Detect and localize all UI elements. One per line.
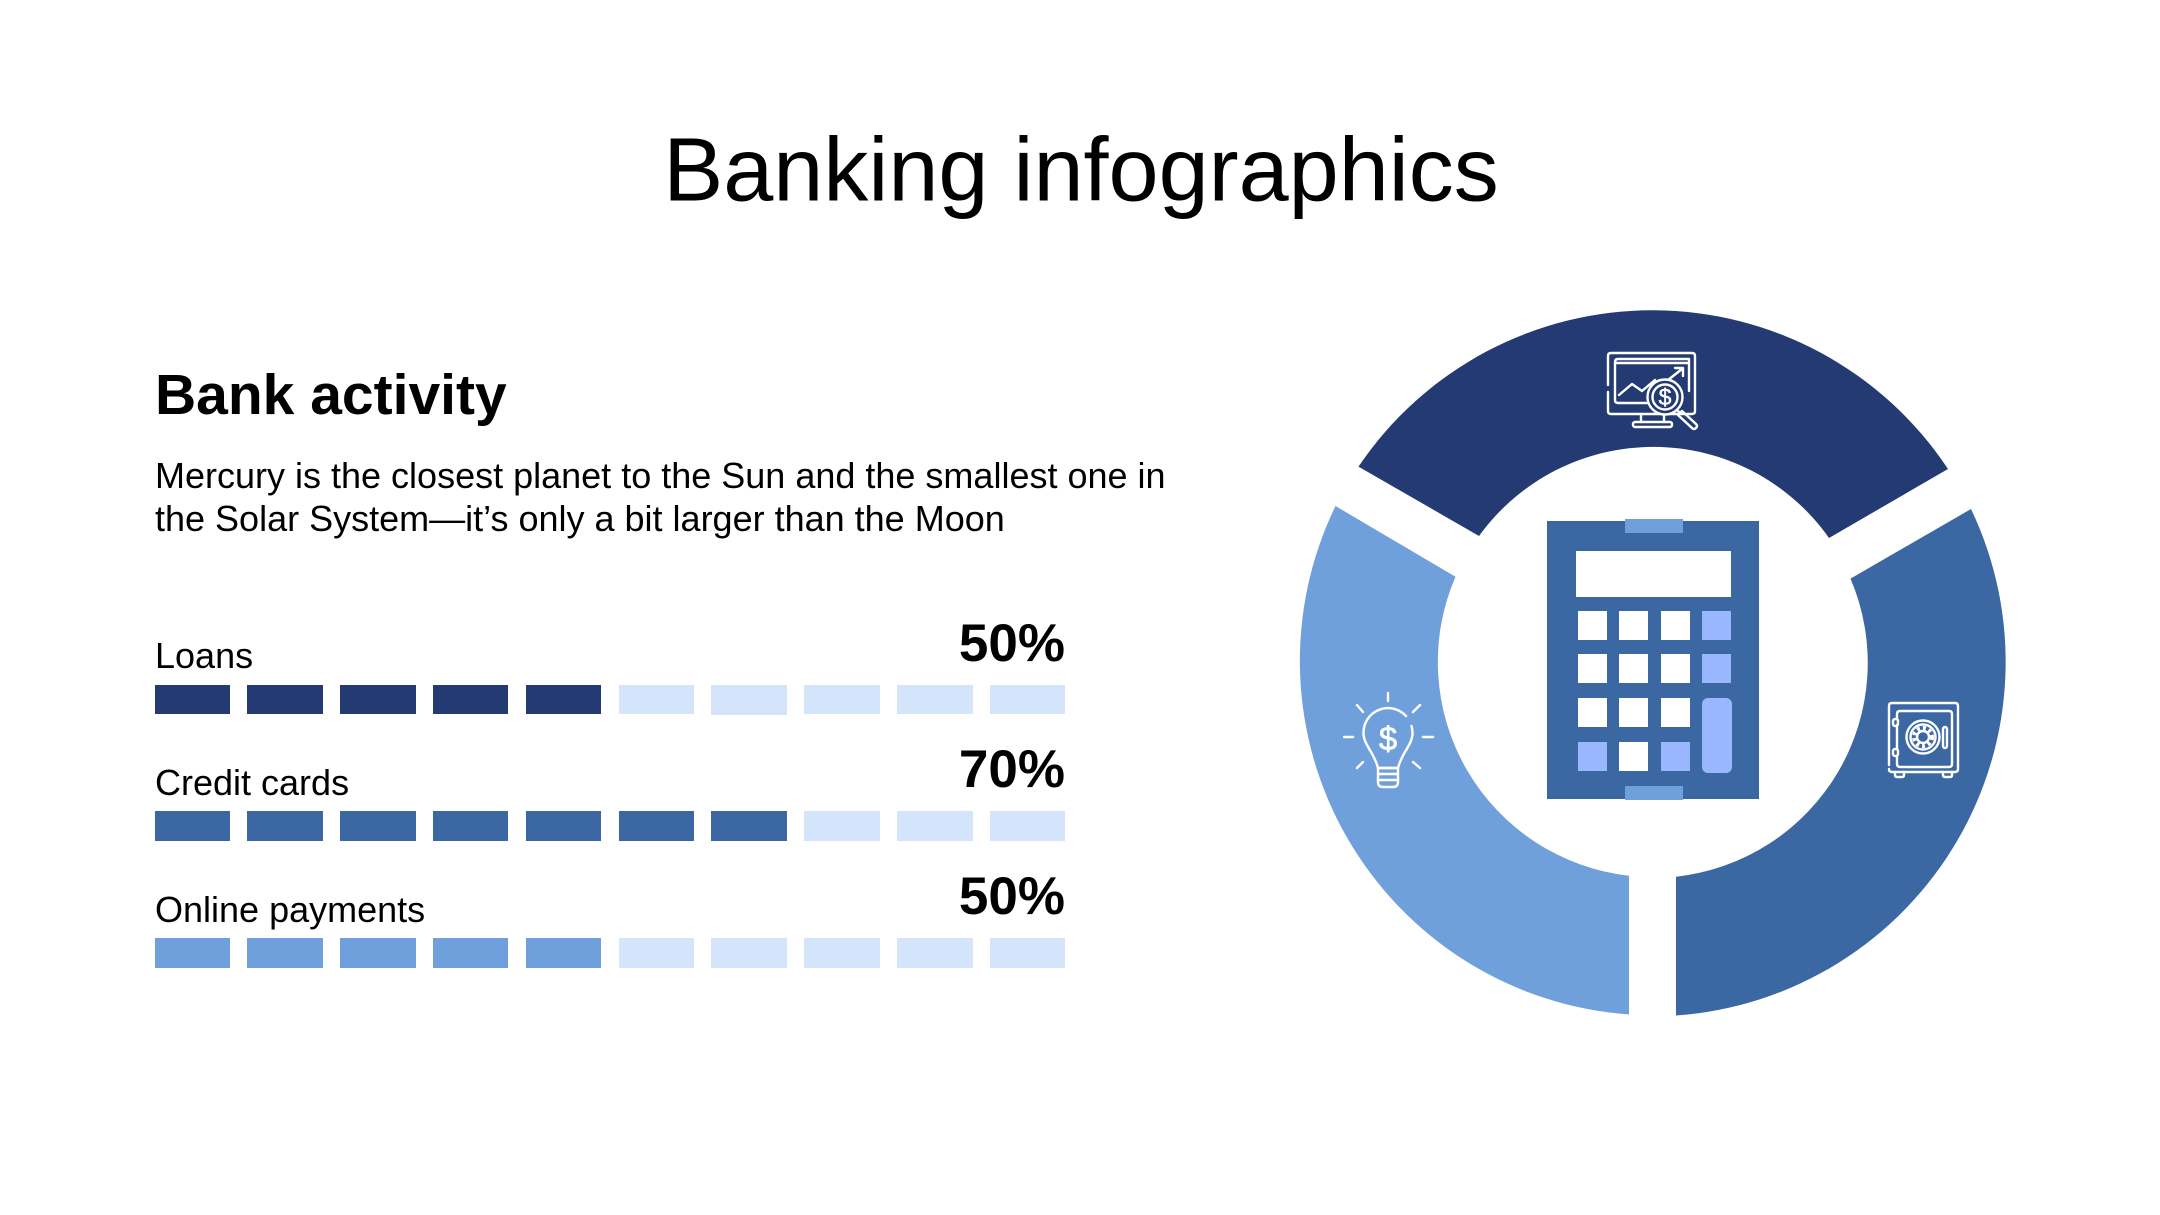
progress bar: online payments: [155, 938, 1065, 968]
progress bar: credit cards: [155, 811, 1065, 841]
progress row: online payments: [155, 867, 1065, 968]
calculator keys: [1578, 611, 1732, 773]
value: loans 50%: 50%: [959, 614, 1065, 673]
progress row: credit cards: [155, 740, 1065, 841]
ring segment: left: [1300, 506, 1629, 1014]
ring diagram: [1300, 310, 2006, 1016]
value: credit cards 70%: 70%: [959, 740, 1065, 799]
calculator body: [1547, 521, 1759, 799]
icon: light bulb: [1344, 693, 1433, 787]
progress bar: loans: [155, 685, 1065, 715]
icon: light bulb dollar sign: $: [1379, 720, 1397, 757]
label: credit cards: Credit cards: [155, 762, 349, 803]
body text: Mercury is the closest planet to the Sun and the smallest one in: [155, 455, 1166, 496]
icon: monitor with magnifier: [1608, 353, 1697, 429]
progress row: loans: [155, 614, 1065, 715]
title: Banking infographics: [663, 120, 1499, 220]
label: online payments: Online payments: [155, 889, 425, 930]
calculator screen: [1576, 551, 1731, 597]
icon: safe: [1889, 703, 1958, 777]
icon: calculator: [1547, 519, 1759, 800]
value: online payments 50%: 50%: [959, 867, 1065, 926]
ring segment: top: [1358, 310, 1948, 538]
label: loans: Loans: [155, 635, 253, 676]
calculator top tab: [1625, 519, 1683, 533]
ring segment: right: [1676, 509, 2006, 1016]
icon: monitor dollar sign: $: [1659, 384, 1672, 410]
calculator bottom tab: [1625, 786, 1683, 800]
heading: bank activity: Bank activity: [155, 363, 507, 427]
body text: the Solar System—it’s only a bit larger than the Moon: [155, 498, 1005, 539]
